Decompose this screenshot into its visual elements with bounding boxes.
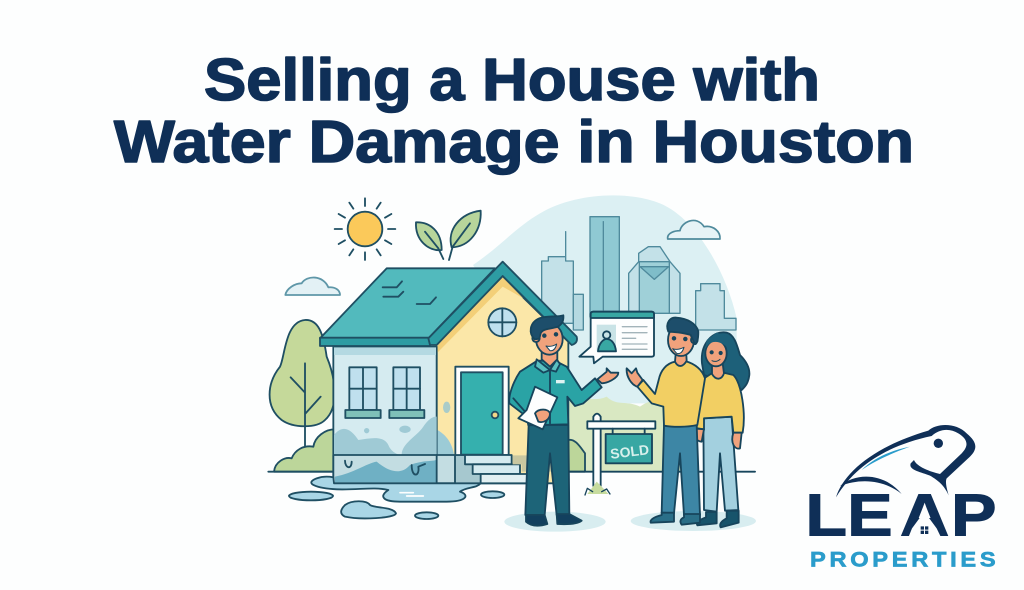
- man sweater: [637, 361, 705, 427]
- agent shoes: [526, 514, 582, 526]
- woman: [694, 332, 749, 527]
- agent hair: [531, 315, 563, 339]
- man face: [668, 324, 694, 356]
- man hair: [667, 318, 698, 344]
- water-stained yellow wall: [402, 417, 437, 455]
- man hand: [627, 368, 643, 387]
- title: Selling a House with: [204, 47, 820, 113]
- agent neck: [542, 348, 557, 367]
- ground line: [268, 469, 335, 474]
- woman sweater: [697, 373, 744, 433]
- windows: [345, 367, 424, 418]
- icon: leaves: [416, 211, 481, 260]
- house scene: [268, 198, 585, 519]
- woman hands: [694, 429, 742, 449]
- clipboard: [518, 387, 557, 429]
- ground line right: [568, 469, 755, 474]
- water puddles: [289, 477, 504, 519]
- door: [455, 367, 509, 455]
- cloud right: [668, 220, 720, 239]
- round window: [488, 308, 516, 336]
- woman jeans: [703, 417, 738, 512]
- yellow wall: [437, 277, 568, 483]
- man shoes: [651, 513, 700, 525]
- man neck: [675, 350, 687, 366]
- people and sign: [504, 312, 756, 532]
- agent face: [536, 323, 563, 355]
- woman neck: [712, 363, 724, 379]
- title: [114, 47, 914, 175]
- speech bubble with listing card: [579, 312, 654, 363]
- logo: frog mark: [836, 425, 975, 497]
- sold sign: SOLD: [609, 441, 650, 462]
- woman hair: [702, 332, 749, 390]
- bush right: [568, 440, 585, 472]
- agent: [509, 315, 618, 526]
- agent shirt: [509, 361, 602, 425]
- woman shoes: [697, 511, 739, 527]
- man: [627, 318, 705, 525]
- illustration backdrop: Houston skyline: [473, 195, 737, 472]
- woman face: [705, 340, 727, 366]
- logo: LEAP wordmark: LEAP: [805, 482, 997, 549]
- agent hand: [535, 368, 618, 422]
- logo: PROPERTIES: PROPERTIES: [810, 548, 999, 572]
- shadows: [504, 512, 606, 532]
- left wall: [333, 347, 437, 483]
- foundation: [333, 455, 480, 483]
- tree: [270, 320, 335, 447]
- logo: [805, 425, 999, 572]
- logo: house cutout in A: [909, 512, 941, 537]
- sold sign: [585, 414, 655, 495]
- title: Water Damage in Houston: [114, 109, 914, 175]
- steps: [465, 455, 553, 483]
- agent trousers: [525, 425, 569, 515]
- cloud left: [285, 278, 340, 295]
- icon: sun: [335, 198, 395, 260]
- man jeans: [662, 425, 700, 515]
- bushes: [274, 429, 335, 472]
- roof: [320, 262, 577, 346]
